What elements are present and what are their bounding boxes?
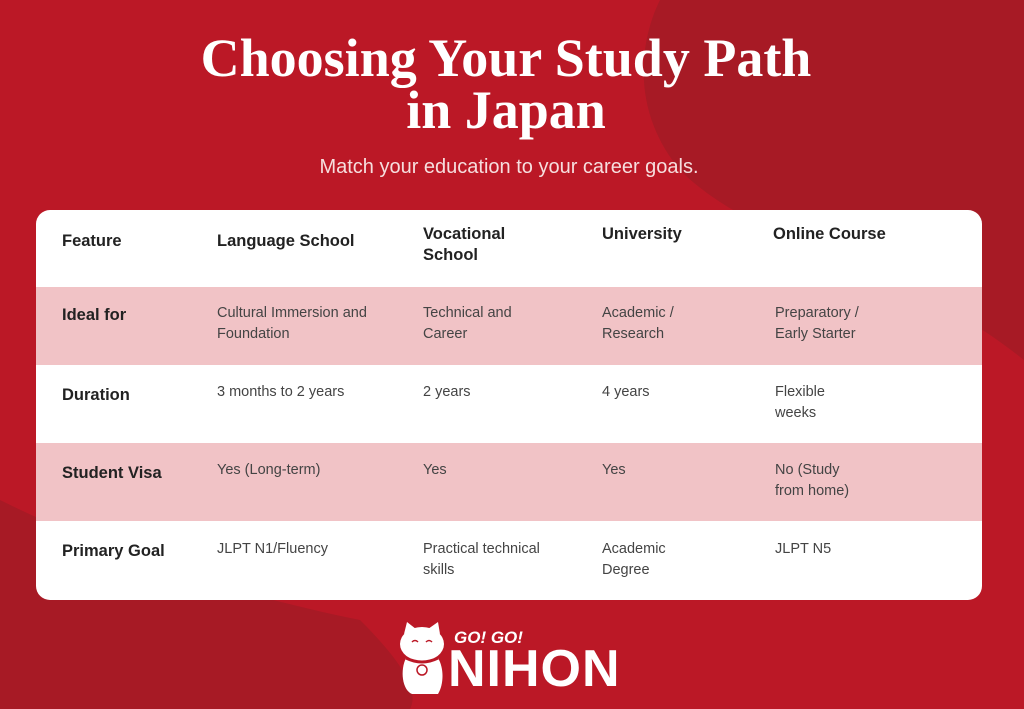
row: student visa: Student Visa	[62, 464, 162, 482]
row: ideal for: Career	[423, 326, 467, 342]
row: primary goal	[62, 541, 831, 578]
comparison table	[36, 210, 982, 600]
logo: Go! Go! Nihon	[400, 622, 621, 698]
row: ideal for: Research	[602, 326, 664, 342]
row: primary goal: Degree	[602, 562, 650, 578]
header row: University	[602, 225, 682, 243]
row: ideal for: Foundation	[217, 326, 290, 342]
header row: Online Course	[773, 225, 886, 243]
row: ideal for: Ideal for	[62, 306, 126, 324]
row: primary goal: Practical technical	[423, 541, 540, 557]
row: primary goal: JLPT N5	[775, 541, 831, 557]
row: ideal for: Technical and	[423, 305, 512, 321]
row: duration: Duration	[62, 386, 130, 404]
row: ideal for: Early Starter	[775, 326, 856, 342]
row: primary goal: JLPT N1/Fluency	[217, 541, 328, 557]
text: NIHON: NIHON	[448, 640, 621, 698]
row: primary goal: Academic	[602, 541, 666, 557]
text: GO! GO!: GO! GO!	[454, 628, 523, 647]
row: duration: Flexible	[775, 384, 825, 400]
row: duration: 4 years	[602, 384, 650, 400]
row: student visa: Yes (Long-term)	[217, 462, 320, 478]
row: primary goal: skills	[423, 562, 454, 578]
row: ideal for: Preparatory /	[775, 305, 859, 321]
subtitle: Match your education to your career goals.	[319, 156, 699, 178]
header row	[62, 225, 886, 264]
header row: Language School	[217, 232, 355, 250]
row: student visa: Yes	[602, 462, 626, 478]
row: duration	[62, 384, 825, 421]
row: student visa: No (Study	[775, 462, 839, 478]
title	[201, 28, 811, 140]
header row: Vocational	[423, 225, 505, 243]
row: student visa: Yes	[423, 462, 447, 478]
row: duration: weeks	[775, 405, 816, 421]
row: ideal for	[36, 287, 982, 365]
title: in Japan	[406, 80, 606, 140]
header row: Feature	[62, 232, 122, 250]
row: ideal for: Academic /	[602, 305, 674, 321]
row: primary goal: Primary Goal	[62, 542, 165, 560]
icon: lucky cat	[400, 622, 444, 694]
header row: School	[423, 246, 478, 264]
title: Choosing Your Study Path	[201, 28, 811, 88]
row: student visa: from home)	[775, 483, 849, 499]
row: duration: 3 months to 2 years	[217, 384, 344, 400]
row: duration: 2 years	[423, 384, 471, 400]
row: student visa	[36, 443, 982, 521]
row: ideal for: Cultural Immersion and	[217, 305, 367, 321]
